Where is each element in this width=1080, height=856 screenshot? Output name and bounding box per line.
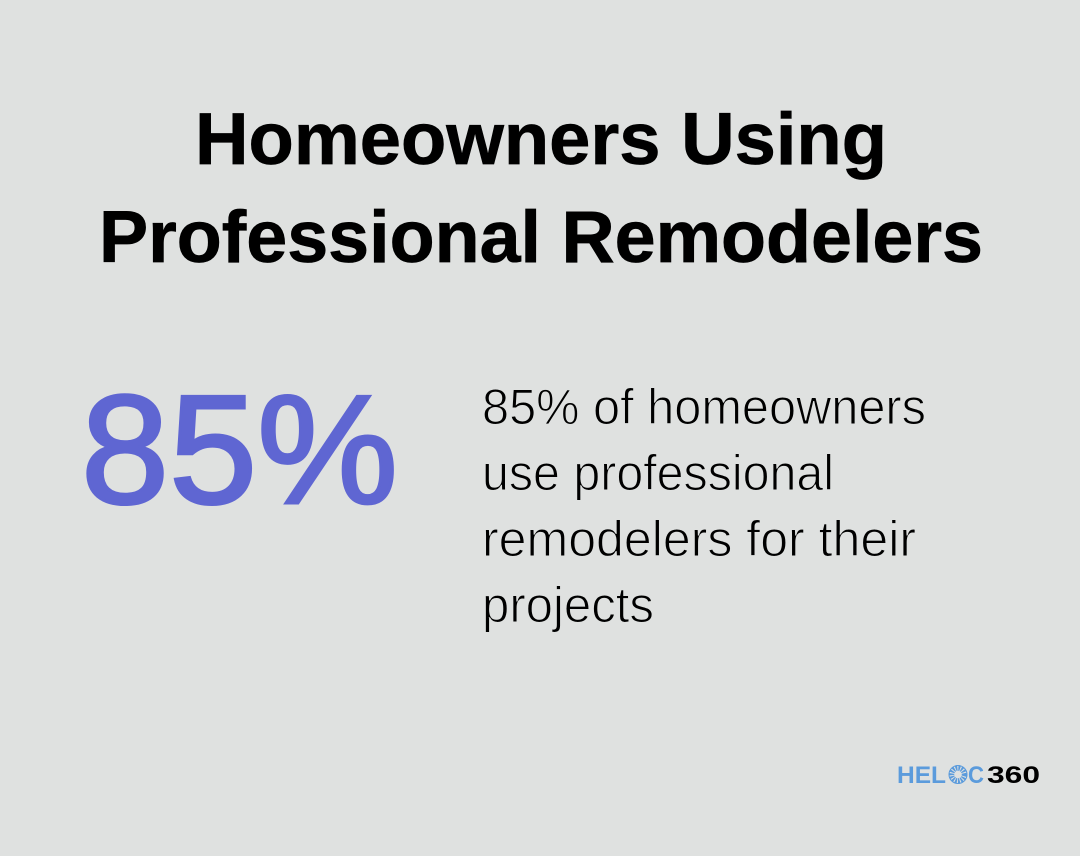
description text: projects — [482, 577, 654, 633]
logo wordmark: 360: 360 — [987, 762, 1040, 789]
logo wordmark: HEL: HEL — [897, 762, 946, 789]
big statistic: 85%: 85% — [81, 363, 398, 536]
icon: logo swirl ring — [949, 766, 967, 784]
title — [99, 99, 983, 278]
description text: 85% of homeowners — [482, 379, 926, 435]
title: Homeowners Using — [195, 99, 887, 180]
description text — [482, 379, 926, 633]
description text: use professional — [482, 445, 834, 501]
description text: remodelers for their — [482, 511, 916, 567]
logo wordmark: C: C — [968, 762, 984, 789]
title: Professional Remodelers — [99, 197, 983, 278]
logo: HELOC360 — [897, 762, 1040, 789]
